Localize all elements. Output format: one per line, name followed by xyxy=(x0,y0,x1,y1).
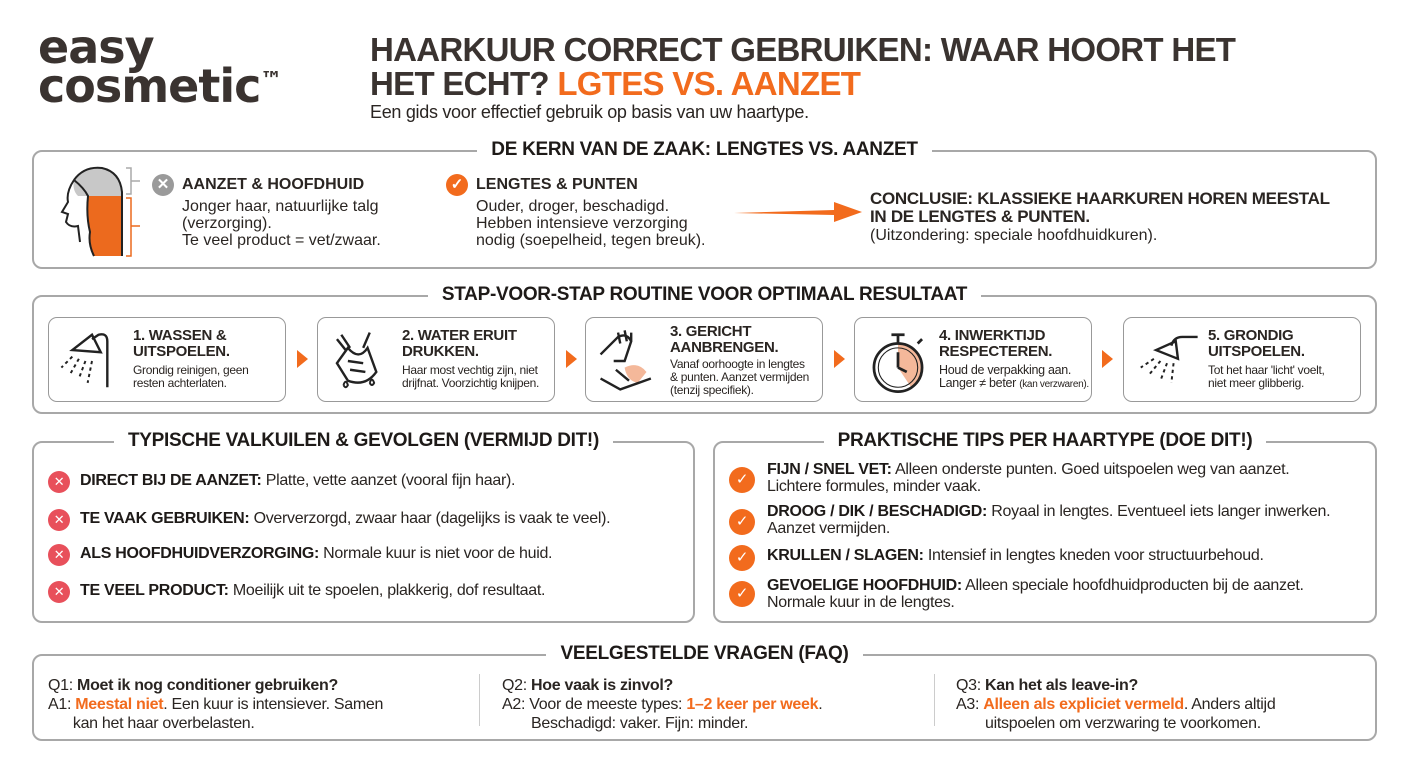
step 5: UITSPOELEN. xyxy=(1208,343,1305,360)
faq 1 xyxy=(48,677,383,732)
faq 2: Q2: Hoe vaak is zinvol? xyxy=(502,677,673,694)
panel: faq xyxy=(32,654,1377,741)
step 3: 3. GERICHT xyxy=(670,323,751,340)
faq 1: Q1: Moet ik nog conditioner gebruiken? xyxy=(48,677,338,694)
faq 1: kan het haar overbelasten. xyxy=(73,715,255,732)
tip 4: ✓ xyxy=(736,585,748,602)
icon: shower xyxy=(60,332,108,388)
faq 3 xyxy=(956,677,1275,732)
step 1 xyxy=(48,317,286,402)
step 4 xyxy=(854,317,1092,402)
step 5: Tot het haar 'licht' voelt, xyxy=(1208,363,1325,377)
panel: kern: Ouder, droger, beschadigd. xyxy=(476,198,669,215)
step 2: drijfnat. Voorzichtig knijpen. xyxy=(402,376,539,390)
logo: easy xyxy=(38,20,154,74)
heading: faq: VEELGESTELDE VRAGEN (FAQ) xyxy=(560,643,849,664)
faq 1: A1: Meestal niet. Een kuur is intensiever. Samen xyxy=(48,696,383,713)
tip 1 xyxy=(729,461,1289,495)
panel: kern: Hebben intensieve verzorging xyxy=(476,215,688,232)
tip 2 xyxy=(729,503,1330,537)
tip 2: DROOG / DIK / BESCHADIGD: Royaal in lengtes. Eventueel iets langer inwerken. xyxy=(767,503,1330,520)
heading: tips: PRAKTISCHE TIPS PER HAARTYPE (DOE DIT!) xyxy=(838,430,1252,451)
conclusie: CONCLUSIE: KLASSIEKE HAARKUREN HOREN MEESTAL xyxy=(870,189,1330,208)
panel: kern: AANZET & HOOFDHUID xyxy=(182,176,364,193)
step 2: DRUKKEN. xyxy=(402,343,479,360)
pitfall 2: ✕ xyxy=(54,512,64,527)
lengtes block xyxy=(446,174,706,249)
panel: kern: (verzorging). xyxy=(182,215,272,232)
faq 3: Q3: Kan het als leave-in? xyxy=(956,677,1138,694)
conclusie: IN DE LENGTES & PUNTEN. xyxy=(870,207,1090,226)
icon: hands applying xyxy=(600,330,652,391)
step 5: niet meer glibberig. xyxy=(1208,376,1304,390)
faq 3: uitspoelen om verzwaring te voorkomen. xyxy=(985,715,1261,732)
arrow 3 xyxy=(834,350,845,368)
step 5: 5. GRONDIG xyxy=(1208,327,1293,344)
arrow 2 xyxy=(566,350,577,368)
pitfall 2: TE VAAK GEBRUIKEN: Oververzorgd, zwaar haar (dagelijks is vaak te veel). xyxy=(80,510,610,527)
heading: routine: STAP-VOOR-STAP ROUTINE VOOR OPTIMAAL RESULTAAT xyxy=(442,284,967,305)
step 1: resten achterlaten. xyxy=(133,376,227,390)
tip 2: Aanzet vermijden. xyxy=(767,520,890,537)
tip 1: ✓ xyxy=(736,471,748,488)
faq 3: A3: Alleen als expliciet vermeld. Anders altijd xyxy=(956,696,1275,713)
step 1: UITSPOELEN. xyxy=(133,343,230,360)
tip 4: Normale kuur in de lengtes. xyxy=(767,594,955,611)
panel: kern xyxy=(32,150,1377,269)
icon: shower xyxy=(1140,336,1198,383)
faq 2 xyxy=(502,677,822,732)
step 5 xyxy=(1123,317,1361,402)
faq 2: Beschadigd: vaker. Fijn: minder. xyxy=(531,715,748,732)
icon: head with hair xyxy=(60,166,140,257)
title: HAARKUUR CORRECT GEBRUIKEN: WAAR HOORT HET xyxy=(370,31,1235,68)
pitfall 4: TE VEEL PRODUCT: Moeilijk uit te spoelen, plakkerig, dof resultaat. xyxy=(80,582,545,599)
arrow 1 xyxy=(297,350,308,368)
heading: valkuilen: TYPISCHE VALKUILEN & GEVOLGEN (VERMIJD DIT!) xyxy=(128,430,599,451)
step 4: Langer ≠ beter (kan verzwaren). xyxy=(939,376,1089,390)
subtitle: Een gids voor effectief gebruik op basis van uw haartype. xyxy=(370,102,809,122)
arrow xyxy=(734,202,862,222)
logo xyxy=(38,20,281,113)
panel: kern: Te veel product = vet/zwaar. xyxy=(182,232,381,249)
panel: kern: ✓ xyxy=(451,176,463,193)
tip 1: Lichtere formules, minder vaak. xyxy=(767,478,981,495)
tip 4: GEVOELIGE HOOFDHUID: Alleen speciale hoofdhuidproducten bij de aanzet. xyxy=(767,577,1304,594)
step 4: 4. INWERKTIJD xyxy=(939,327,1045,344)
step 4: Houd de verpakking aan. xyxy=(939,363,1071,377)
panel: routine xyxy=(32,295,1377,414)
panel: tips xyxy=(713,441,1377,623)
step 3: Vanaf oorhoogte in lengtes xyxy=(670,357,805,371)
step 3: & punten. Aanzet vermijden xyxy=(670,370,809,384)
pitfall 1: ✕ xyxy=(54,474,64,489)
step 3 xyxy=(585,317,823,402)
faq 2: A2: Voor de meeste types: 1–2 keer per week. xyxy=(502,696,822,713)
step 3: (tenzij specifiek). xyxy=(670,383,754,397)
step 3: AANBRENGEN. xyxy=(670,339,778,356)
tip 3: KRULLEN / SLAGEN: Intensief in lengtes kneden voor structuurbehoud. xyxy=(767,547,1264,564)
aanzet block xyxy=(152,174,381,249)
step 1: Grondig reinigen, geen xyxy=(133,363,248,377)
panel: valkuilen xyxy=(32,441,695,623)
panel: kern: ✕ xyxy=(157,176,169,193)
tip 4 xyxy=(729,577,1304,611)
step 1: 1. WASSEN & xyxy=(133,327,226,344)
pitfall 3: ALS HOOFDHUIDVERZORGING: Normale kuur is niet voor de huid. xyxy=(80,545,552,562)
panel: kern: Jonger haar, natuurlijke talg xyxy=(182,198,379,215)
tip 1: FIJN / SNEL VET: Alleen onderste punten. Goed uitspoelen weg van aanzet. xyxy=(767,461,1289,478)
logo: cosmetic™ xyxy=(38,59,281,113)
arrow 4 xyxy=(1102,350,1113,368)
icon: stopwatch xyxy=(872,333,924,393)
conclusie xyxy=(870,189,1330,244)
title: HET ECHT? LGTES VS. AANZET xyxy=(370,65,860,102)
tip 3: ✓ xyxy=(736,549,748,566)
step 2 xyxy=(317,317,555,402)
conclusie: (Uitzondering: speciale hoofdhuidkuren). xyxy=(870,227,1157,244)
tip 2: ✓ xyxy=(736,513,748,530)
pitfall 4: ✕ xyxy=(54,584,64,599)
step 4: RESPECTEREN. xyxy=(939,343,1052,360)
panel: kern: LENGTES & PUNTEN xyxy=(476,176,638,193)
heading: kern: DE KERN VAN DE ZAAK: LENGTES VS. AANZET xyxy=(491,139,918,160)
step 2: 2. WATER ERUIT xyxy=(402,327,517,344)
title xyxy=(370,31,1236,102)
tip 3 xyxy=(729,545,1264,571)
icon: hand squeezing xyxy=(336,332,378,388)
panel: kern: nodig (soepelheid, tegen breuk). xyxy=(476,232,706,249)
pitfall 3: ✕ xyxy=(54,547,64,562)
step 2: Haar most vechtig zijn, niet xyxy=(402,363,538,377)
pitfall 1: DIRECT BIJ DE AANZET: Platte, vette aanzet (vooral fijn haar). xyxy=(80,472,515,489)
